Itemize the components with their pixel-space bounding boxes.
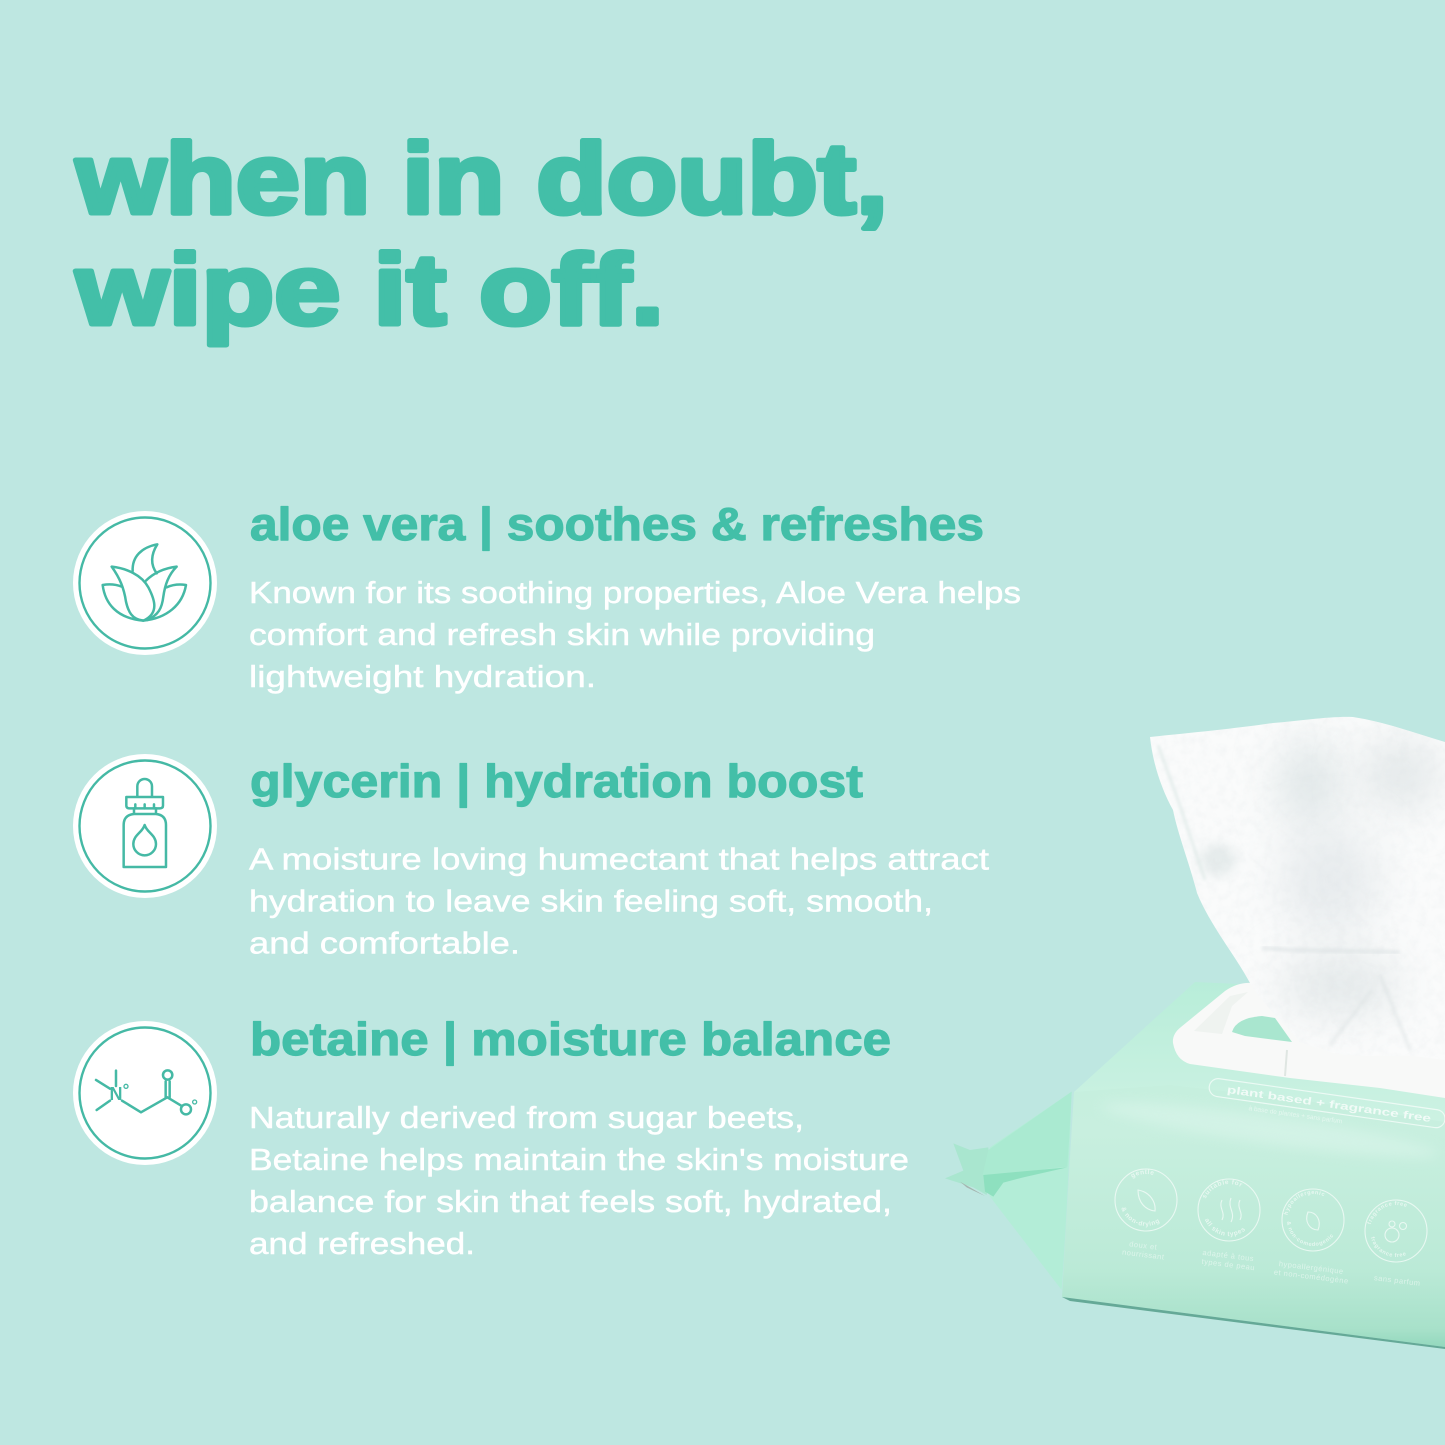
pack badges: nourrissant bbox=[1122, 1247, 1165, 1262]
text block: glycerin bbox=[249, 842, 989, 960]
text block: betaine bbox=[249, 1100, 909, 1261]
pack badges: & non-drying bbox=[1122, 1208, 1160, 1228]
pack label bbox=[1207, 1077, 1445, 1140]
pack badges: hypoallergenic bbox=[1284, 1191, 1324, 1215]
text block: betaine: Naturally derived from sugar beets, bbox=[249, 1100, 804, 1135]
text block: glycerin: and comfortable. bbox=[249, 926, 520, 960]
pack badges: hypoallergénique bbox=[1278, 1259, 1344, 1276]
panel: betaine bbox=[73, 1013, 909, 1261]
heading: aloe vera: aloe vera | soothes & refreshes bbox=[250, 498, 984, 550]
pack badges: & non-comedogenic bbox=[1287, 1222, 1333, 1246]
pack badges: fragrance free bbox=[1367, 1201, 1407, 1224]
text block: aloe vera: Known for its soothing properties, Aloe Vera helps bbox=[249, 575, 1021, 610]
pack badges: sans parfum bbox=[1374, 1273, 1421, 1288]
pack badges: gentle bbox=[1131, 1170, 1154, 1178]
text block: aloe vera: comfort and refresh skin while providing bbox=[249, 617, 875, 652]
text block: betaine: Betaine helps maintain the skin's moisture bbox=[249, 1142, 909, 1177]
pack badges bbox=[1114, 1168, 1428, 1288]
title: when in doubt, bbox=[75, 123, 888, 235]
plastic lid bbox=[1173, 983, 1445, 1098]
heading: betaine: betaine | moisture balance bbox=[250, 1013, 891, 1065]
pack badges: adapté à tous bbox=[1202, 1248, 1255, 1263]
pack top surface bbox=[1074, 982, 1445, 1125]
wipe cloth bbox=[1140, 710, 1445, 1070]
heading: glycerin: glycerin | hydration boost bbox=[250, 755, 863, 807]
pack badges: doux et bbox=[1129, 1239, 1158, 1252]
text block: glycerin: hydration to leave skin feeling soft, smooth, bbox=[249, 884, 933, 918]
text block: betaine: balance for skin that feels soft, hydrated, bbox=[249, 1184, 892, 1219]
pack badges: et non-comédogène bbox=[1273, 1267, 1349, 1286]
icon: glycerin bottle bbox=[73, 754, 217, 898]
title: wipe it off. bbox=[75, 234, 664, 346]
text block: betaine: and refreshed. bbox=[249, 1226, 475, 1261]
product: wipes pack bbox=[946, 716, 1445, 1349]
pack badges: all skin types bbox=[1205, 1218, 1245, 1238]
pack front face bbox=[1062, 1085, 1445, 1347]
pack label: plant based + fragrance free bbox=[1226, 1084, 1432, 1125]
pack label: à base de plantes + sans parfum bbox=[1248, 1105, 1343, 1125]
icon: betaine molecule bbox=[73, 1021, 217, 1165]
pack side gusset bbox=[945, 1092, 1072, 1290]
icon: betaine molecule: N bbox=[110, 1084, 122, 1104]
text block: aloe vera bbox=[249, 575, 1021, 694]
pack badges: suitable for bbox=[1203, 1180, 1242, 1198]
pack badges: types de peau bbox=[1201, 1257, 1255, 1272]
pack badges: fragrance free bbox=[1371, 1236, 1406, 1257]
panel: glycerin bbox=[73, 754, 989, 960]
title bbox=[75, 123, 888, 346]
icon: aloe vera bbox=[73, 511, 217, 655]
text block: aloe vera: lightweight hydration. bbox=[249, 659, 596, 694]
panel: aloe vera bbox=[73, 498, 1021, 694]
text block: glycerin: A moisture loving humectant that helps attract bbox=[249, 842, 989, 876]
